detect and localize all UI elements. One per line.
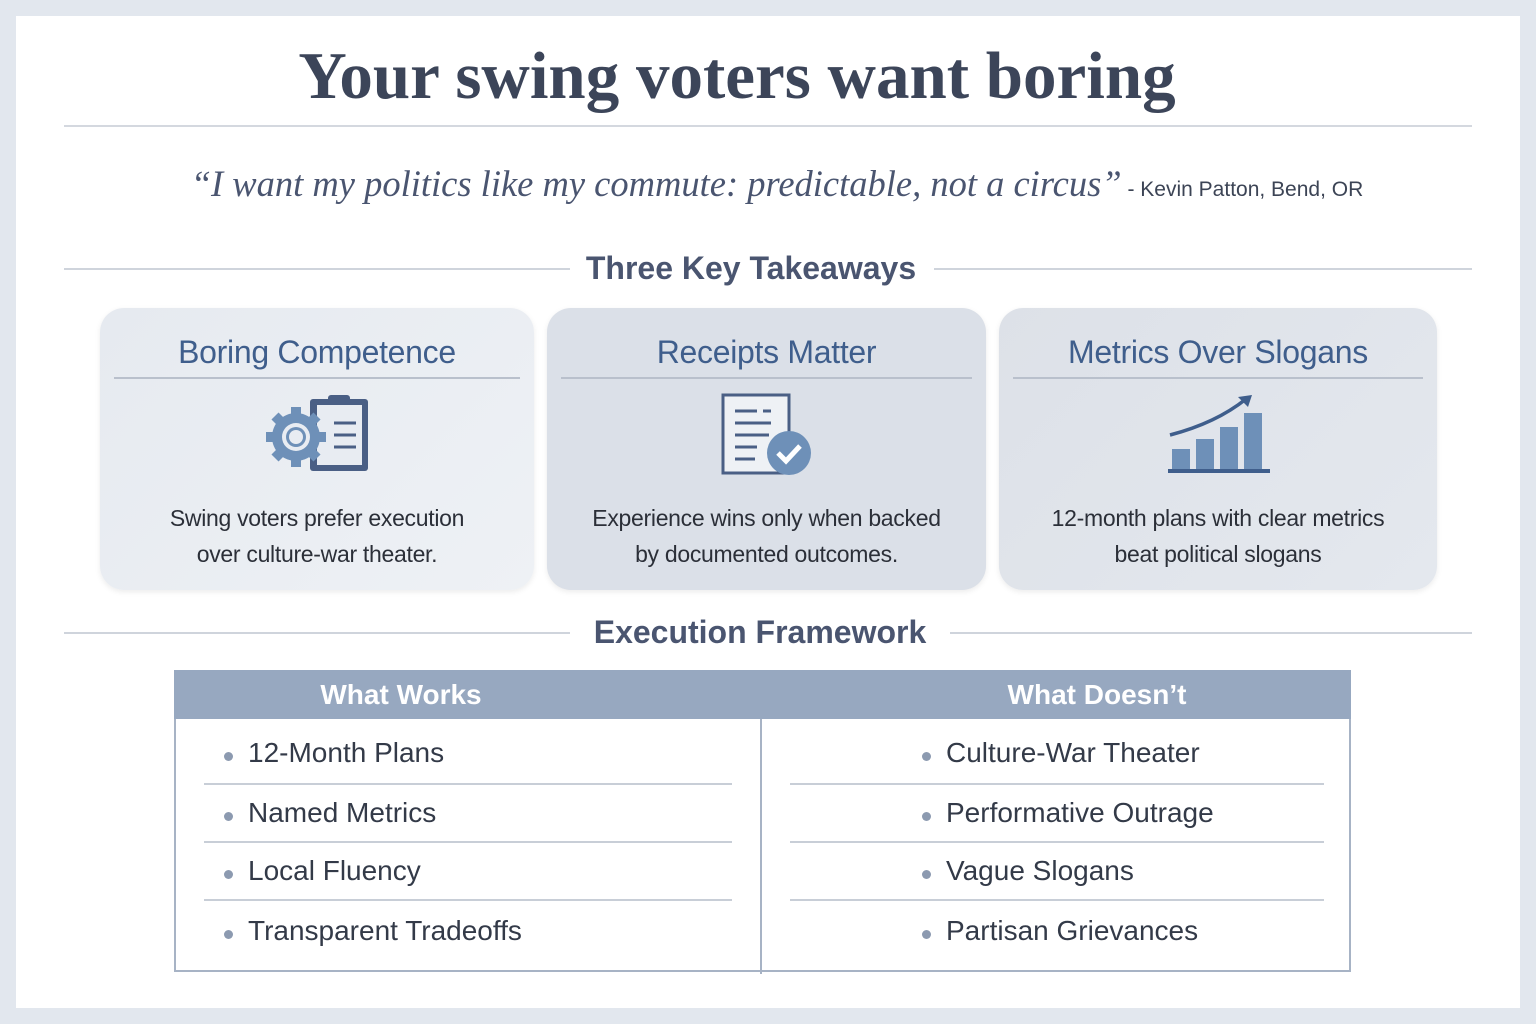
quote: “I want my politics like my commute: predictable, not a circus” - Kevin Patton, Bend, OR: [191, 163, 1363, 204]
card: Boring Competence: over culture-war theater.: [197, 541, 437, 567]
section heading: Execution Framework: Execution Framework: [594, 614, 926, 650]
column: what doesn't: [790, 737, 1324, 946]
column: what doesn't: Partisan Grievances: [946, 915, 1198, 946]
icon: document check: [722, 394, 811, 475]
table header: What Doesn’t: [1008, 679, 1186, 710]
icon: gear clipboard: [266, 395, 368, 471]
column: what works: Local Fluency: [248, 855, 421, 886]
card: Receipts Matter: Receipts Matter: [657, 334, 876, 370]
card: Receipts Matter: [547, 308, 986, 590]
card: Boring Competence: Boring Competence: [178, 334, 456, 370]
card: Metrics Over Slogans: [999, 308, 1437, 590]
column: what works: [204, 737, 732, 946]
column: what doesn't: Culture-War Theater: [946, 737, 1200, 768]
section heading: Three Key Takeaways: Three Key Takeaways: [586, 250, 916, 286]
card: Metrics Over Slogans: Metrics Over Slogans: [1068, 334, 1368, 370]
card: Metrics Over Slogans: beat political slogans: [1115, 541, 1321, 567]
column: what works: 12-Month Plans: [248, 737, 444, 768]
card: Boring Competence: Swing voters prefer execution: [170, 505, 464, 531]
column: what works: Named Metrics: [248, 797, 436, 828]
column: what doesn't: Performative Outrage: [946, 797, 1214, 828]
card: Receipts Matter: by documented outcomes.: [635, 541, 898, 567]
title: Your swing voters want boring: [298, 39, 1176, 113]
card: Receipts Matter: Experience wins only when backed: [592, 505, 941, 531]
table header: What Works: [320, 679, 482, 710]
card: Boring Competence: [100, 308, 534, 590]
column: what works: Transparent Tradeoffs: [248, 915, 522, 946]
table header: [174, 670, 1351, 719]
card: Metrics Over Slogans: 12-month plans with clear metrics: [1052, 505, 1384, 531]
icon: bar chart: [1168, 395, 1270, 473]
column: what doesn't: Vague Slogans: [946, 855, 1134, 886]
table: execution framework: [174, 670, 1351, 972]
